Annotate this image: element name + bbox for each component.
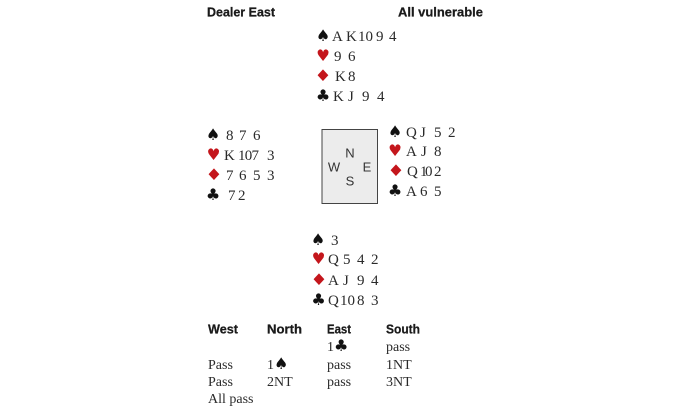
- bidding sequence: 1♠: [267, 354, 288, 373]
- panel: east hand: J: [421, 144, 427, 160]
- panel: north hand: 9: [362, 89, 370, 105]
- panel: east hand: ♣: [388, 181, 402, 200]
- panel: compass table: N: [345, 146, 355, 160]
- panel: west hand: K: [224, 148, 235, 164]
- panel: west hand: 7: [228, 188, 236, 204]
- panel: south hand: 4: [357, 252, 365, 268]
- panel: south hand: 3: [331, 233, 338, 249]
- panel: south hand: 3: [371, 293, 378, 309]
- panel: north hand: K: [335, 69, 346, 85]
- panel: north hand: 9: [376, 29, 384, 45]
- panel: east hand: ♦: [387, 162, 405, 181]
- panel: north hand: ♠: [316, 26, 330, 45]
- panel: north hand: 8: [348, 69, 356, 85]
- panel: north hand: 10: [358, 29, 373, 45]
- panel: east hand: ♥: [388, 142, 402, 160]
- panel: east hand: ♠: [388, 122, 402, 141]
- bidding sequence: 1♣: [327, 336, 348, 355]
- panel: north hand: ♦: [314, 67, 332, 86]
- heading: vulnerability: All vulnerable: [398, 6, 483, 20]
- bidding sequence: 1NT: [386, 358, 412, 373]
- bidding sequence: pass: [327, 375, 351, 390]
- bidding column headings: [208, 322, 420, 336]
- panel: north hand: K: [346, 29, 357, 45]
- panel: west hand: 5: [253, 168, 260, 184]
- panel: east hand: 2: [448, 125, 456, 141]
- bidding sequence: 3NT: [386, 375, 412, 390]
- panel: west hand: ♠: [206, 125, 220, 144]
- panel: south hand: Q: [328, 293, 339, 309]
- panel: west hand: 6: [239, 168, 247, 184]
- panel: north hand: ♥: [316, 47, 330, 65]
- panel: compass table: E: [363, 160, 372, 174]
- panel: north hand: [314, 26, 397, 105]
- panel: south hand: ♦: [310, 271, 328, 290]
- panel: south hand: J: [343, 273, 349, 289]
- panel: east hand: 6: [420, 184, 428, 200]
- panel: south hand: A: [328, 273, 339, 289]
- panel: south hand: 2: [371, 252, 378, 268]
- bidding sequence: Pass: [208, 375, 233, 390]
- bidding sequence: Pass: [208, 358, 233, 373]
- panel: south hand: 10: [340, 293, 355, 309]
- panel: south hand: Q: [328, 252, 339, 268]
- panel: north hand: A: [332, 29, 343, 45]
- bidding sequence: [208, 336, 412, 407]
- bidding sequence: All pass: [208, 392, 254, 407]
- bidding column headings: South: [386, 322, 420, 336]
- panel: south hand: 4: [371, 273, 379, 289]
- bidding column headings: East: [327, 322, 352, 336]
- panel: west hand: ♣: [206, 185, 220, 204]
- panel: south hand: 5: [343, 252, 350, 268]
- panel: north hand: K: [333, 89, 344, 105]
- panel: east hand: A: [406, 184, 417, 200]
- panel: north hand: 9: [334, 49, 342, 65]
- panel: east hand: [387, 122, 456, 200]
- panel: north hand: 4: [377, 89, 385, 105]
- bidding sequence: pass: [386, 340, 410, 355]
- panel: west hand: 8: [226, 128, 234, 144]
- panel: east hand: 8: [434, 144, 442, 160]
- panel: west hand: 3: [267, 148, 274, 164]
- panel: west hand: 2: [238, 188, 246, 204]
- panel: south hand: [310, 230, 379, 309]
- panel: east hand: Q: [407, 164, 418, 180]
- panel: south hand: ♣: [311, 290, 326, 309]
- panel: east hand: 2: [434, 164, 442, 180]
- panel: north hand: ♣: [316, 86, 330, 105]
- panel: north hand: 6: [348, 49, 356, 65]
- panel: south hand: ♠: [311, 230, 325, 249]
- panel: east hand: J: [420, 125, 426, 141]
- panel: west hand: ♥: [207, 146, 220, 164]
- panel: north hand: 4: [389, 29, 397, 45]
- panel: south hand: 9: [357, 273, 364, 289]
- panel: compass table: [322, 130, 378, 204]
- panel: south hand: ♥: [312, 250, 325, 268]
- panel: west hand: ♦: [205, 166, 223, 185]
- bidding column headings: West: [208, 322, 239, 336]
- panel: west hand: 3: [267, 168, 274, 184]
- bidding sequence: pass: [327, 358, 351, 373]
- panel: west hand: 107: [238, 148, 260, 164]
- panel: south hand: 8: [357, 293, 364, 309]
- panel: west hand: 7: [226, 168, 234, 184]
- panel: compass table: S: [346, 174, 355, 188]
- panel: east hand: 5: [434, 125, 442, 141]
- panel: west hand: [205, 125, 274, 204]
- panel: bidding table: [208, 322, 420, 407]
- panel: east hand: A: [406, 144, 417, 160]
- panel: west hand: 7: [239, 128, 247, 144]
- panel: east hand: Q: [406, 125, 417, 141]
- panel: north hand: J: [348, 89, 354, 105]
- panel: compass table: W: [328, 160, 341, 174]
- panel: east hand: 5: [434, 184, 442, 200]
- heading: dealer: Dealer East: [207, 6, 276, 20]
- bidding column headings: North: [267, 322, 302, 336]
- panel: east hand: 10: [420, 164, 432, 180]
- panel: west hand: 6: [253, 128, 261, 144]
- bidding sequence: 2NT: [267, 375, 293, 390]
